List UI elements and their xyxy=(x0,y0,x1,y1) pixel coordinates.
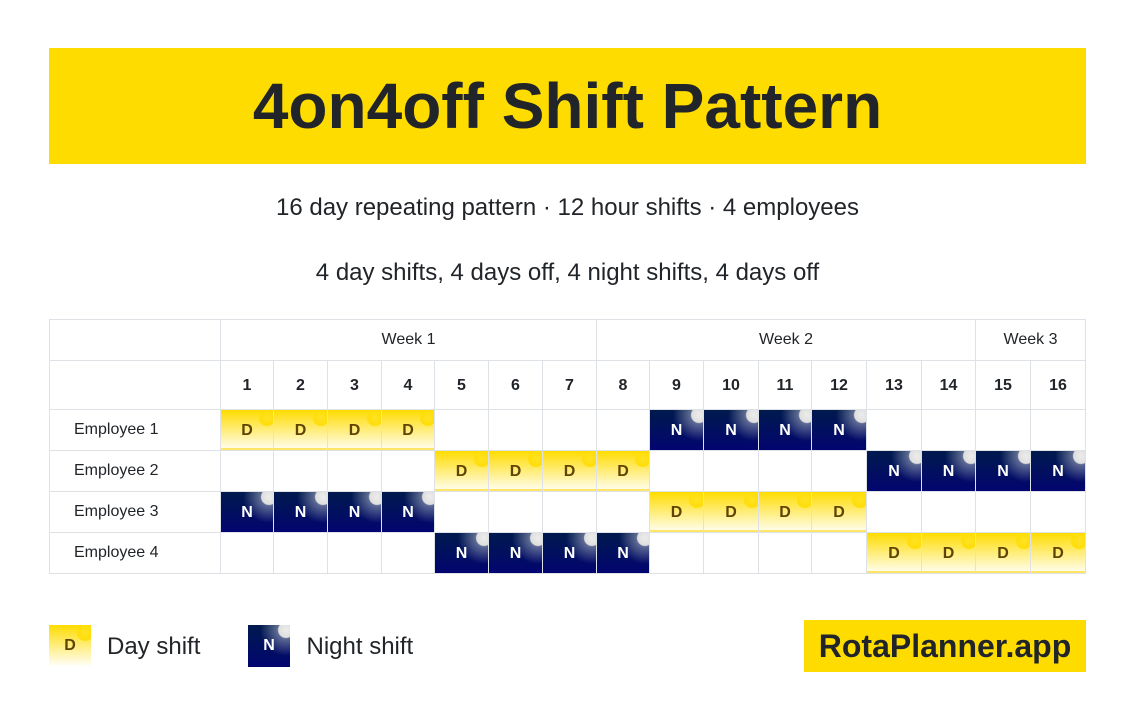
rota table: 4 xyxy=(404,377,412,394)
brand badge: RotaPlanner.app xyxy=(819,628,1071,664)
rota table: Employee 4 xyxy=(74,544,158,561)
row: employee 1 xyxy=(74,410,866,450)
rota table: N xyxy=(617,545,629,562)
legend: night shift: N xyxy=(263,637,275,654)
rota table: D xyxy=(456,463,467,480)
rota table: D xyxy=(564,463,575,480)
legend: night shift xyxy=(248,625,413,667)
rota table: Employee 2 xyxy=(74,462,158,479)
brand badge xyxy=(804,620,1086,672)
rota table: 15 xyxy=(994,377,1012,394)
subtitle: pattern summary: 16 day repeating pattern · 12 hour shifts · 4 employees xyxy=(276,194,859,221)
rota table: 11 xyxy=(777,377,793,394)
rota table: N xyxy=(349,504,360,521)
rota table: 7 xyxy=(565,377,574,394)
row: employee 3 xyxy=(74,492,866,532)
rota table: 8 xyxy=(619,377,627,394)
row: employee 2 xyxy=(74,451,1085,491)
rota table: D xyxy=(997,545,1009,562)
rota table: 6 xyxy=(511,377,520,394)
rota table: N xyxy=(564,545,575,562)
legend: day shift: D xyxy=(64,637,76,654)
rota table: D xyxy=(671,504,682,521)
rota table: 10 xyxy=(722,377,740,394)
rota table: N xyxy=(241,504,253,521)
rota table: D xyxy=(295,422,306,439)
rota table: N xyxy=(295,504,306,521)
row: employee 4 xyxy=(74,533,1085,573)
rota table: Employee 1 xyxy=(74,421,158,438)
rota table: N xyxy=(779,422,791,439)
rota table: 1 xyxy=(243,377,251,394)
rota table: D xyxy=(402,422,414,439)
rota table: N xyxy=(943,463,954,480)
rota table: Week 3 xyxy=(1004,331,1057,348)
rota table: N xyxy=(456,545,467,562)
rota table: D xyxy=(349,422,360,439)
rota table: N xyxy=(997,463,1009,480)
rota table: Week 2 xyxy=(759,331,813,348)
rota table: Employee 3 xyxy=(74,503,158,520)
rota table: N xyxy=(725,422,737,439)
rota table: D xyxy=(833,504,845,521)
rota table: D xyxy=(779,504,791,521)
rota table: 14 xyxy=(940,377,957,394)
rota table: D xyxy=(725,504,737,521)
rota table: 9 xyxy=(672,377,681,394)
rota table: N xyxy=(402,504,414,521)
title: 4on4off Shift Pattern xyxy=(253,70,882,142)
subtitle: shift sequence: 4 day shifts, 4 days off, 4 night shifts, 4 days off xyxy=(316,259,819,286)
rota table: D xyxy=(888,545,900,562)
rota table: 3 xyxy=(350,377,359,394)
rota table: N xyxy=(833,422,845,439)
rota table: 5 xyxy=(457,377,466,394)
rota table: 12 xyxy=(830,377,848,394)
day numbers xyxy=(243,377,1067,394)
rota table: N xyxy=(671,422,682,439)
legend: day shift: Day shift xyxy=(107,633,200,660)
rota table: N xyxy=(510,545,521,562)
rota table: Week 1 xyxy=(382,331,435,348)
rota table: D xyxy=(510,463,521,480)
title xyxy=(49,48,1086,164)
rota table: N xyxy=(1052,463,1064,480)
rota table: D xyxy=(617,463,629,480)
legend: night shift: Night shift xyxy=(306,633,413,660)
rota table: D xyxy=(241,422,253,439)
rota table: D xyxy=(1052,545,1064,562)
rota table: 16 xyxy=(1049,377,1067,394)
rota table: N xyxy=(888,463,900,480)
rota table: 2 xyxy=(296,377,305,394)
rota table: D xyxy=(943,545,954,562)
rota table: 13 xyxy=(885,377,903,394)
week headers xyxy=(382,331,1057,348)
legend: day shift xyxy=(49,625,200,666)
